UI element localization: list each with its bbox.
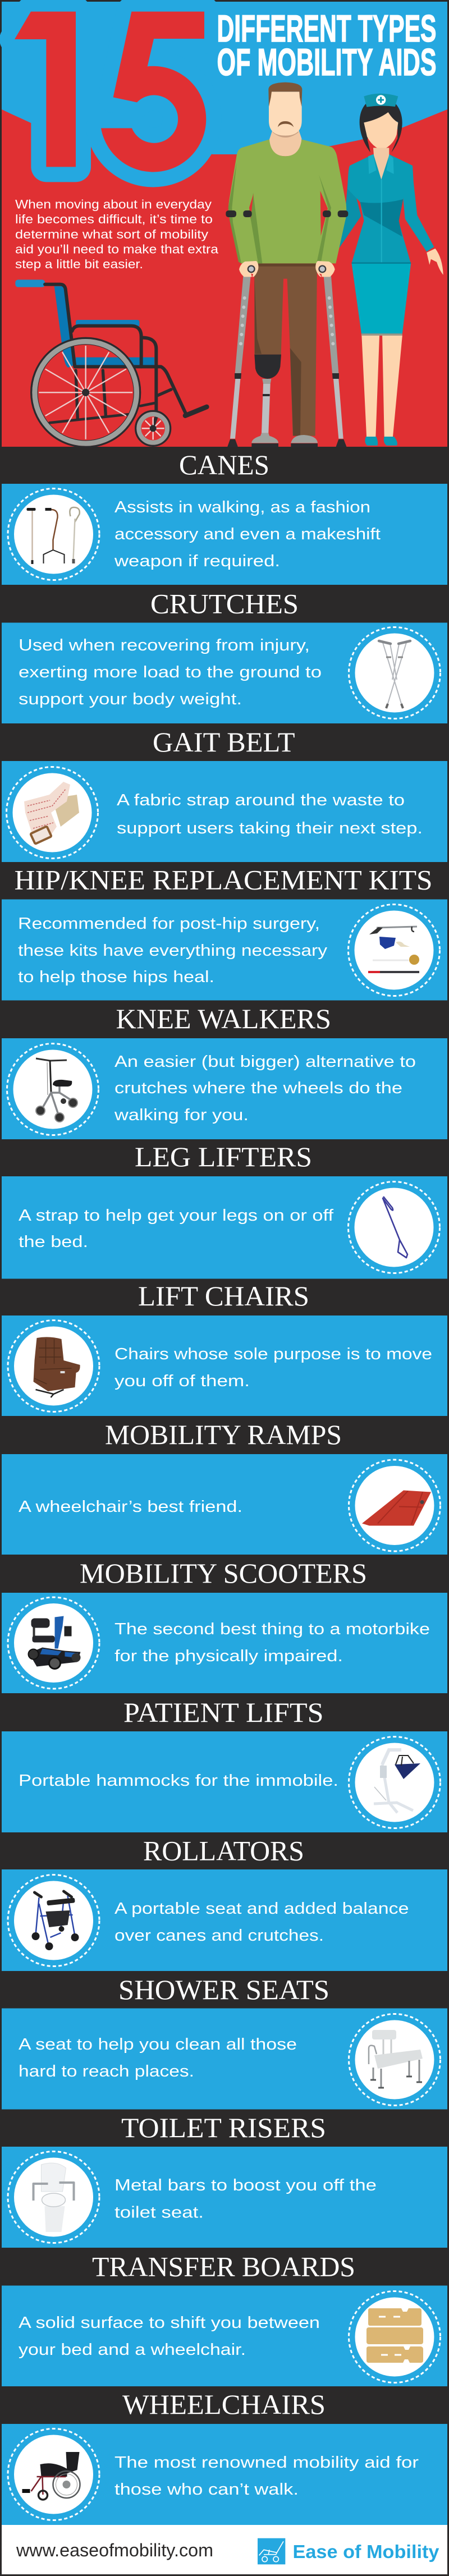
- heading: MOBILITY SCOOTERS: [80, 1557, 367, 1589]
- heading: LIFT CHAIRS: [138, 1280, 309, 1312]
- heading: PATIENT LIFTS: [123, 1697, 323, 1728]
- panel: leg lifters: [2, 1141, 447, 1278]
- icon: wheelchair photo: [8, 2429, 99, 2520]
- heading: CRUTCHES: [150, 588, 299, 620]
- description: toilet seat.: [114, 2203, 204, 2221]
- heading: CANES: [179, 449, 269, 480]
- panel: rollators: [2, 1835, 447, 1971]
- panel: footer: [2, 2525, 447, 2574]
- right crutch: [324, 276, 347, 447]
- description: accessory and even a makeshift: [114, 525, 381, 543]
- logo wordmark: Ease of Mobility: [293, 2542, 439, 2563]
- description: [19, 2314, 320, 2359]
- description: [19, 2036, 297, 2080]
- description: An easier (but bigger) alternative to: [114, 1053, 416, 1071]
- description: [19, 1207, 334, 1251]
- icon: gait belt: [7, 767, 98, 859]
- intro text: determine what sort of mobility: [15, 227, 209, 241]
- description: those who can’t walk.: [114, 2481, 299, 2499]
- big number 15: [15, 12, 206, 172]
- description: A solid surface to shift you between: [19, 2314, 320, 2332]
- description: [19, 636, 322, 708]
- panel: mobility scooters: [2, 1557, 447, 1693]
- heading: LEG LIFTERS: [135, 1141, 312, 1172]
- description: exerting more load to the ground to: [19, 663, 322, 681]
- description: [114, 1620, 430, 1665]
- figure: man on crutches: [226, 82, 348, 447]
- panel: hero: [2, 2, 447, 447]
- description: the bed.: [19, 1233, 88, 1251]
- description: hard to reach places.: [19, 2062, 194, 2080]
- panel: shower seats: [2, 1974, 447, 2109]
- heading: TRANSFER BOARDS: [92, 2250, 355, 2282]
- panel: toilet risers: [2, 2112, 447, 2248]
- intro text: life becomes difficult, it’s time to: [15, 212, 213, 226]
- icon: shower seat: [349, 2014, 440, 2106]
- description: weapon if required.: [114, 552, 280, 570]
- website url: www.easeofmobility.com: [16, 2540, 213, 2560]
- description: [117, 791, 423, 837]
- description: you off of them.: [114, 1372, 250, 1390]
- icon: rollator: [8, 1874, 99, 1967]
- description: support users taking their next step.: [117, 819, 423, 837]
- description: these kits have everything necessary: [18, 942, 328, 960]
- description: support your body weight.: [19, 690, 242, 708]
- description: [114, 1900, 409, 1945]
- panel: gait belt: [2, 726, 447, 862]
- description: [114, 1345, 432, 1390]
- description: Recommended for post-hip surgery,: [18, 915, 320, 933]
- description: for the physically impaired.: [114, 1647, 343, 1665]
- description: Metal bars to boost you off the: [114, 2176, 377, 2194]
- intro text: aid you’ll need to make that extra: [15, 242, 219, 256]
- description: [18, 915, 328, 986]
- icon: wheelchair illustration: [15, 279, 207, 447]
- panel: crutches: [2, 588, 447, 723]
- description: A fabric strap around the waste to: [117, 791, 405, 809]
- logo mark: [258, 2538, 285, 2564]
- description: A wheelchair’s best friend.: [19, 1498, 242, 1516]
- panel: patient lifts: [2, 1697, 447, 1832]
- heading: SHOWER SEATS: [118, 1974, 329, 2005]
- intro text: When moving about in everyday: [15, 198, 212, 211]
- icon: knee walker: [7, 1044, 99, 1135]
- heading: WHEELCHAIRS: [122, 2389, 326, 2420]
- panel: transfer boards: [2, 2250, 447, 2386]
- description: over canes and crutches.: [114, 1927, 324, 1945]
- heading: HIP/KNEE REPLACEMENT KITS: [15, 864, 432, 896]
- description: crutches where the wheels do the: [114, 1079, 402, 1097]
- intro text: step a little bit easier.: [15, 257, 143, 271]
- description: The second best thing to a motorbike: [114, 1620, 430, 1638]
- description: to help those hips heal.: [18, 968, 214, 986]
- description: The most renowned mobility aid for: [114, 2454, 419, 2472]
- icon: lift chair: [8, 1320, 99, 1412]
- heading: TOILET RISERS: [121, 2112, 326, 2143]
- icon: crutches: [349, 627, 440, 718]
- heading: GAIT BELT: [153, 726, 295, 758]
- icon: hip kit tools: [348, 905, 440, 996]
- panel: mobility ramps: [2, 1419, 447, 1555]
- panel: knee walkers: [2, 1003, 447, 1139]
- description: Assists in walking, as a fashion: [114, 498, 370, 516]
- description: [114, 498, 381, 570]
- panel: lift chairs: [2, 1280, 447, 1416]
- heading: ROLLATORS: [143, 1835, 304, 1867]
- icon: canes: [8, 488, 99, 580]
- icon: toilet riser: [8, 2152, 99, 2243]
- icon: patient lift: [349, 1736, 440, 1828]
- icon: leg lifter strap: [348, 1182, 440, 1273]
- description: walking for you.: [114, 1106, 249, 1124]
- description: [114, 1053, 416, 1124]
- panel: wheelchairs: [2, 2389, 447, 2525]
- description: Portable hammocks for the immobile.: [19, 1772, 338, 1790]
- icon: scooter: [8, 1597, 99, 1689]
- description: Chairs whose sole purpose is to move: [114, 1345, 432, 1363]
- description: A portable seat and added balance: [114, 1900, 409, 1918]
- title: [217, 7, 437, 84]
- icon: ramp: [349, 1460, 440, 1551]
- panel: hip and knee replacement kits: [2, 864, 447, 1000]
- description: [114, 2454, 419, 2499]
- left crutch: [227, 276, 251, 447]
- description: A seat to help you clean all those: [19, 2036, 297, 2054]
- description: Used when recovering from injury,: [19, 636, 310, 654]
- description: A strap to help get your legs on or off: [19, 1207, 334, 1225]
- heading: KNEE WALKERS: [116, 1003, 331, 1034]
- description: [114, 2176, 377, 2221]
- intro text: [15, 198, 219, 271]
- description: your bed and a wheelchair.: [19, 2341, 246, 2359]
- figure: nurse: [338, 94, 443, 446]
- icon: transfer boards: [349, 2291, 440, 2383]
- heading: MOBILITY RAMPS: [105, 1419, 342, 1450]
- panel: canes: [2, 449, 447, 585]
